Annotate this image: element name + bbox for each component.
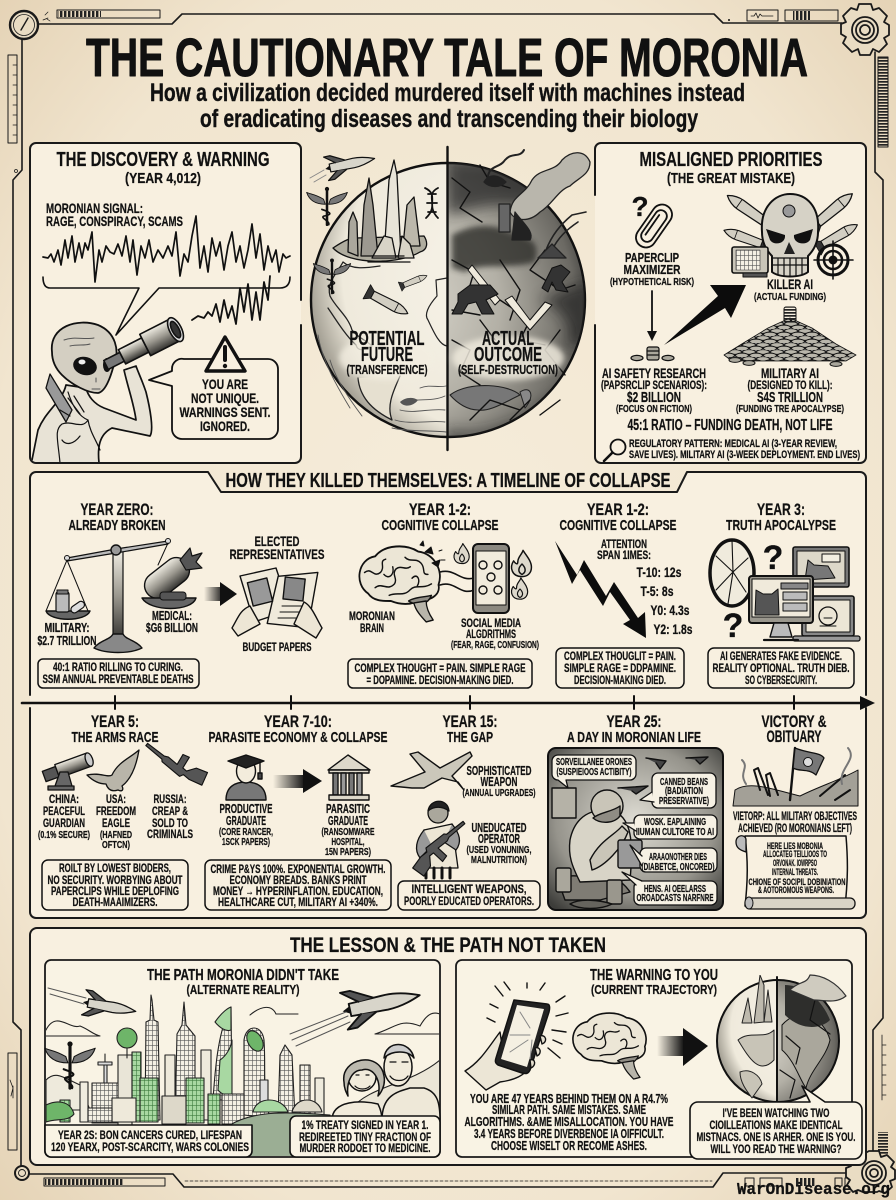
zigzag falling arrow	[555, 541, 646, 638]
callout	[708, 648, 854, 688]
section: year 3 truth apocalypse	[708, 500, 860, 688]
label: actual outcome: (SELF-DESTRUCTION)	[458, 362, 558, 377]
callout: HEALTHCARE CUT, MILITARY AI +340%.	[218, 897, 378, 909]
heading: YEAR 25:	[606, 712, 662, 731]
divider line	[446, 147, 449, 450]
icon: paperclip	[631, 191, 676, 251]
icon: bank	[328, 755, 370, 800]
alien figure	[30, 366, 152, 470]
icon: elderly couple	[332, 1044, 440, 1120]
icon: cracked brain	[359, 541, 445, 622]
callout: you are not unique: NOT UNIQUE.	[191, 390, 259, 406]
scroll obituary: ALLOCATEG TEILLIOOS TO	[763, 849, 827, 860]
alien signal wave	[192, 276, 270, 324]
panel: discovery and warning	[30, 143, 301, 470]
attention span values: T-10: 12s	[636, 565, 682, 580]
label: moronian brain: BRAIN	[360, 621, 384, 635]
bubble: news	[622, 872, 717, 905]
label: productive graduate: GRADUATE	[226, 814, 266, 828]
label: parasitic graduate: GRADUATE	[328, 814, 368, 828]
heading: THE GAP	[447, 729, 493, 746]
bubble: work: WOSK. EAPLAINING	[644, 816, 706, 828]
panel: timeline of collapse	[22, 470, 875, 918]
heading: HOW THEY KILLED THEMSELVES: A TIMELINE OF COLLAPSE	[226, 470, 670, 492]
heading: YEAR 1-2:	[409, 500, 471, 519]
rockets and medical icons on left half	[307, 147, 438, 321]
icon: brain	[573, 1013, 646, 1079]
label: sophisticated weapon: (ANNUAL UPGRADES)	[462, 787, 536, 799]
bubble: news: OROADCASTS NARFNRE	[636, 892, 714, 904]
section: year 1-2 attention span	[555, 500, 692, 688]
paperclip label: MAXIMIZER	[624, 263, 680, 277]
icon: gear top right	[841, 4, 889, 55]
attention span values: Y0: 4.3s	[650, 603, 690, 618]
alien head	[52, 323, 117, 393]
label: parasitic graduate	[322, 802, 375, 858]
bubble: canned beans: CANNED BEANS	[660, 776, 708, 788]
bubble: work	[623, 815, 717, 839]
section: year 15 the gap	[391, 712, 540, 910]
paperclip label: PAPERCLIP	[625, 251, 679, 265]
heading	[208, 712, 388, 746]
icon: rocket small	[48, 988, 138, 1024]
label: productive graduate: 1SCK PAPERS)	[222, 837, 270, 848]
sub icon: computer	[732, 247, 768, 277]
scroll obituary	[736, 836, 855, 909]
callout: NO SECURITY. WORBYING ABOUT	[48, 875, 182, 887]
scroll obituary: INTERNAL THREATS.	[772, 867, 818, 878]
label: russia: SOLD TO	[152, 816, 188, 830]
callout	[348, 659, 532, 688]
callout: COMPLEX THOUGLIT = PAIN.	[564, 651, 676, 663]
attention span values: Y2: 1.8s	[654, 622, 692, 637]
callout	[205, 860, 391, 910]
signal label	[46, 201, 183, 229]
arrow: paperclip to coins	[647, 291, 657, 341]
warning text: CHOOSE WISELT OR RECOME ASHES.	[491, 1139, 647, 1153]
heading: YEAR 15:	[442, 712, 498, 731]
label: military: $2.7 TRILLION	[38, 634, 96, 648]
city on globe	[333, 160, 427, 262]
label: usa: OFTCN)	[102, 840, 130, 851]
killer AI label: (ACTUAL FUNDING)	[754, 291, 826, 303]
scene: flag over ruins	[733, 748, 858, 806]
heading: MISALIGNED PRIORITIES	[640, 149, 822, 171]
panel: path not taken	[45, 960, 440, 1160]
scroll obituary: & AOTOROMOUS WEAPONS.	[758, 885, 834, 896]
callout: DECISION-MAKING DIED.	[574, 675, 666, 687]
callout: INTELLIGENT WEAPONS,	[412, 882, 526, 896]
label: actual outcome	[452, 328, 564, 380]
icon: cracked mirror	[710, 540, 754, 606]
icon: child with rifle	[408, 801, 475, 878]
callout: treaty: MURDER RODOET TO MEDICINE.	[300, 1141, 430, 1155]
icon: rifle	[145, 731, 210, 791]
victory text	[733, 811, 857, 835]
label: usa: USA:	[106, 792, 126, 806]
icon: question marks: ?	[723, 607, 743, 645]
icon: magnifier	[604, 440, 626, 461]
heading: TRUTH APOCALYPSE	[726, 517, 836, 534]
callout	[556, 648, 684, 688]
warning text: YOU ARE 47 YEARS BEHIND THEM ON A R4.7%	[470, 1092, 668, 1106]
heading: YEAR 7-10:	[264, 712, 332, 731]
label: actual outcome: OUTCOME	[474, 344, 542, 366]
heading	[762, 712, 826, 746]
heading: YEAR 5:	[91, 712, 139, 731]
heading: (CURRENT TRAJECTORY)	[591, 982, 717, 997]
attention span values: T-5: 8s	[640, 584, 674, 599]
label: russia	[147, 792, 193, 841]
military AI label: (DESIGNED TO KILL):	[748, 378, 832, 392]
sub icon: target	[814, 241, 853, 279]
heading: THE PATH MORONIA DIDN'T TAKE	[147, 967, 339, 984]
panel: warning to you	[456, 960, 862, 1159]
military AI label: MILITARY AI	[761, 365, 819, 381]
connector wires	[440, 571, 474, 591]
callout: COMPLEX THOUGHT = PAIN. SIMPLE RAGE	[354, 663, 526, 675]
heading: ALREADY BROKEN	[68, 517, 166, 534]
label: actual outcome: ACTUAL	[482, 328, 534, 350]
callout: PAPERCLIPS WHILE DEPLOFING	[51, 886, 179, 898]
smoke and ruined factory	[484, 150, 590, 258]
label: productive graduate: (CORE RANCER,	[219, 827, 273, 838]
label: military	[38, 621, 96, 648]
label: parasitic graduate: 15N PAPERS)	[325, 847, 371, 858]
label: uneducated operator: UNEDUCATED	[472, 821, 526, 835]
label: parasitic graduate: (RANSOMWARE	[322, 827, 375, 838]
label: uneducated operator	[466, 821, 532, 866]
signal label: MORONIAN SIGNAL:	[46, 201, 143, 216]
label: attention span: ATTENTION	[601, 539, 647, 551]
callout: 40:1 RATIO RILLING TO CURING.	[53, 662, 183, 674]
section: year 7-10 parasite economy	[205, 712, 391, 910]
bubble: grandmother dies	[630, 845, 717, 873]
heading: YEAR 3:	[757, 500, 805, 519]
icon: killer AI skull	[721, 187, 861, 279]
callout: POORLY EDUCATED OPERATORS.	[404, 894, 534, 908]
label: china: CHINA:	[49, 792, 79, 806]
icon: dove	[87, 750, 139, 791]
callout: SIMPLE RAGE = DDPAMINE.	[564, 663, 676, 675]
warning text	[464, 1092, 674, 1153]
section: year 5 arms race	[38, 712, 210, 910]
heading: VICTORY &	[762, 712, 826, 731]
label: usa: EAGLE	[102, 816, 130, 830]
icon: paperclip: ?	[631, 191, 649, 222]
panel: the lesson	[30, 928, 866, 1165]
label: potential future	[339, 328, 435, 380]
paperclip label: (HYPOTHETICAL RISK)	[610, 276, 694, 288]
callout: MONEY → HYPERINFLATION. EDUCATION,	[213, 886, 383, 898]
speech bracket	[43, 277, 290, 335]
section: year 25 a day in life	[548, 712, 723, 910]
callout: year 25: 120 YEARX, POST-SCARCITY, WARS COLONIES	[51, 1140, 249, 1154]
callout: ECONOMY BREADS. BANKS PRINT	[230, 875, 366, 887]
AI safety label	[601, 365, 707, 415]
subheading: (YEAR 4,012)	[125, 170, 201, 187]
heading	[147, 967, 339, 997]
callout: CRIME P&YS 100%. EXPONENTIAL GROWTH.	[210, 864, 386, 876]
label: china: (0.1% SECURE)	[38, 829, 90, 841]
label: social media algorithms: ALGDRITHMS	[466, 627, 516, 641]
subtitle: of eradicating diseases and transcending their biology	[200, 105, 698, 133]
bubble: canned beans: PRESERVATIVE)	[659, 795, 709, 807]
section: year 1-2 social media	[348, 500, 539, 688]
icon: telescope	[42, 752, 95, 790]
warning text: 3.4 YEARS BEFORE DIVERBENOE IA OIFFICULT.	[474, 1127, 664, 1141]
paperclip label	[610, 251, 694, 288]
scroll obituary: ORVONAK. IOWRPSO	[773, 858, 817, 869]
bubble: surveillance drones: SORVEILLANEE ORONES	[556, 756, 632, 768]
heading	[442, 712, 498, 746]
arrow: funding to killer AI	[664, 285, 746, 345]
warning text: ALGORITHMS. &AME MISALLOCATION. YOU HAVE	[464, 1115, 674, 1129]
heading: (ALTERNATE REALITY)	[186, 982, 300, 997]
heading	[68, 500, 166, 534]
green city blocks and towers	[80, 1082, 88, 1122]
scroll obituary: HERE LIES MOBONIA	[767, 841, 823, 852]
callout	[398, 881, 540, 910]
AI safety label: (FOCUS ON FICTION)	[616, 403, 692, 415]
callout: watching two civilizations	[690, 1086, 862, 1159]
callout: treaty: REDIREETED TINY FRACTION OF	[299, 1130, 431, 1144]
icon: question marks	[723, 539, 783, 645]
callout: you are not unique: WARNINGS SENT.	[180, 404, 270, 420]
label: elected representatives: REPRESENTATIVES	[230, 546, 324, 562]
globe right half: actual outcome	[448, 162, 586, 438]
killer AI label	[754, 276, 826, 303]
telescope	[100, 315, 187, 377]
callout: SO CYBERSECURITY.	[745, 675, 817, 687]
callout: treaty: 1% TREATY SIGNED IN YEAR 1.	[302, 1118, 428, 1132]
military AI label: (FUNDING TRE APOCALYPSE)	[736, 403, 844, 415]
scene: man eating in bunker	[548, 748, 723, 910]
label: elected representatives	[230, 533, 324, 562]
callout: watching two civilizations: I'VE BEEN WATCHING TWO	[722, 1106, 830, 1120]
skyline illustration	[46, 995, 440, 1160]
label: medical	[146, 609, 198, 635]
label: sophisticated weapon: SOPHISTICATED	[466, 764, 532, 778]
label: budget papers: BUDGET PAPERS	[242, 640, 312, 654]
icon: coin pile	[724, 307, 856, 366]
section: year zero	[38, 500, 324, 688]
label: social media algorithms: (FEAR, RAGE, CONFUSION)	[451, 639, 539, 651]
label: productive graduate: PRODUCTIVE	[220, 802, 272, 816]
callout: you are not unique	[149, 337, 278, 439]
label: usa: (HAFNED	[100, 830, 132, 841]
label: potential future: FUTURE	[361, 344, 413, 366]
bubble: grandmother dies: ARAAONOTHER DIES	[649, 851, 707, 863]
label: russia: CRIMINALS	[147, 827, 193, 841]
bubble: surveillance drones: (SUSPIEIOOS ACTIBITY)	[556, 766, 632, 778]
icon: graduate	[226, 755, 266, 800]
bubble: work: IIUMAN CULTORE TO AI	[636, 826, 714, 838]
globe: potential vs actual	[307, 147, 590, 450]
icon: budget papers in hands	[232, 568, 322, 638]
section: victory and obituary	[733, 712, 858, 909]
icon: small coin stack	[631, 347, 674, 361]
label: china	[38, 792, 90, 841]
callout: year 25: YEAR 2S: BON CANCERS CURED, LIFESPAN	[58, 1128, 242, 1142]
label: productive graduate	[219, 802, 273, 848]
bubble: grandmother dies: (DIABETCE, ONCORED)	[642, 861, 714, 873]
bubble: surveillance drones	[552, 755, 636, 788]
subtitle	[150, 79, 745, 133]
callout: year 25	[45, 1125, 252, 1157]
icon: screens with fake media	[749, 547, 860, 641]
label: elected representatives: ELECTED	[254, 533, 300, 549]
label: social media algorithms	[451, 616, 539, 651]
icon: scale	[46, 538, 202, 652]
military AI label	[736, 365, 844, 415]
heading: THE LESSON & THE PATH NOT TAKEN	[290, 934, 606, 957]
heading: PARASITE ECONOMY & COLLAPSE	[208, 729, 388, 746]
heading: THE ARMS RACE	[72, 729, 158, 746]
label: moronian brain: MORONIAN	[349, 609, 395, 623]
heading: A DAY IN MORONIAN LIFE	[567, 729, 701, 746]
subheading: (THE GREAT MISTAKE)	[667, 170, 795, 187]
globe left half: potential future	[310, 162, 446, 438]
war machines	[452, 265, 570, 314]
icon: space shuttle	[290, 977, 424, 1046]
heading: THE WARNING TO YOU	[590, 967, 718, 984]
label: uneducated operator: MALNUTRITION)	[471, 854, 527, 866]
label: uneducated operator: OPERATOR	[478, 832, 520, 846]
heading: COGNITIVE COLLAPSE	[560, 517, 676, 534]
arrow	[657, 1028, 708, 1066]
heading	[567, 712, 701, 746]
waveform	[43, 216, 290, 282]
callout: you are not unique: IGNORED.	[200, 418, 250, 434]
callout: ROILT BY LOWEST BIODERS,	[59, 863, 171, 875]
label: russia: RUSSIA:	[154, 792, 186, 806]
warning text: SIMILAR PATH. SAME MISTAKES. SAME	[492, 1103, 646, 1117]
callout: SSM ANNUAL PREVENTABLE DEATHS	[42, 674, 194, 686]
icon: jet	[391, 752, 472, 790]
callout	[42, 860, 188, 910]
label: social media algorithms: SOCIAL MEDIA	[461, 616, 521, 630]
heading	[726, 500, 836, 534]
heading: YEAR 1-2:	[587, 500, 649, 519]
heading: COGNITIVE COLLAPSE	[382, 517, 498, 534]
label: sophisticated weapon	[462, 764, 536, 799]
heading	[560, 500, 676, 534]
label: china: PEACEFUL	[43, 804, 85, 818]
label: attention span	[597, 539, 651, 562]
signal label: RAGE, CONSPIRACY, SCAMS	[46, 214, 183, 229]
bubble: canned beans: (BADIATION	[665, 785, 703, 797]
label: russia: CREAP &	[152, 804, 188, 818]
regulatory pattern note	[629, 438, 860, 461]
label: moronian brain	[349, 609, 395, 635]
label: parasitic graduate: HOSPITAL,	[332, 837, 365, 848]
AI safety label: $2 BILLION	[627, 389, 681, 406]
callout: = DOPAMINE. DECISION-MAKING DIED.	[366, 675, 514, 687]
label: uneducated operator: (USED VONUNING,	[466, 844, 532, 856]
label: medical: $G6 BILLION	[146, 621, 198, 635]
arrow	[204, 582, 237, 606]
label: usa: FREEDOM	[96, 804, 136, 818]
heading: YEAR ZERO:	[80, 500, 154, 519]
label: sophisticated weapon: WEAPON	[480, 775, 518, 789]
heading	[72, 712, 158, 746]
arrow	[273, 769, 322, 793]
timeline axis	[22, 696, 875, 710]
military AI label: S4S TRILLION	[757, 389, 823, 406]
callout	[38, 659, 199, 688]
icon: gear bottom right	[846, 1151, 895, 1193]
label: potential future: POTENTIAL	[350, 328, 424, 350]
heading	[590, 967, 718, 997]
icon: split globe	[717, 975, 846, 1103]
AI safety label: (PAPSRCLIP SCENARIOS):	[601, 378, 707, 392]
bubble: canned beans	[640, 773, 716, 808]
heading	[382, 500, 498, 534]
callout: you are not unique: YOU ARE	[202, 376, 248, 392]
label: parasitic graduate: PARASITIC	[326, 802, 370, 816]
label: medical: MEDICAL:	[152, 609, 192, 623]
bubble: news: HENS. AI OEELARSS	[644, 883, 706, 895]
label: usa	[96, 792, 136, 851]
label: potential future: (TRANSFERENCE)	[346, 362, 428, 377]
callout: DEATH-MAAIMIZERS.	[72, 897, 158, 909]
icon: phone with flames	[454, 544, 531, 613]
label: attention span: SPAN 1IMES:	[597, 550, 651, 562]
AI safety label: AI SAFETY RESEARCH	[602, 365, 706, 381]
label: military: MILITARY:	[44, 621, 90, 635]
heading: OBITUARY	[766, 727, 822, 746]
label: china: GUARDIAN	[43, 816, 85, 830]
icon: hand with phone	[465, 982, 568, 1090]
heading: THE DISCOVERY & WARNING	[56, 149, 270, 171]
icon: question marks: ?	[763, 539, 783, 577]
attention span values	[636, 565, 692, 637]
watermark: WarOnDisease.org	[737, 1181, 890, 1200]
callout: treaty	[290, 1116, 440, 1157]
killer AI label: KILLER AI	[767, 276, 813, 292]
icon: caduceus	[45, 1041, 95, 1088]
panel: misaligned priorities	[595, 143, 866, 463]
